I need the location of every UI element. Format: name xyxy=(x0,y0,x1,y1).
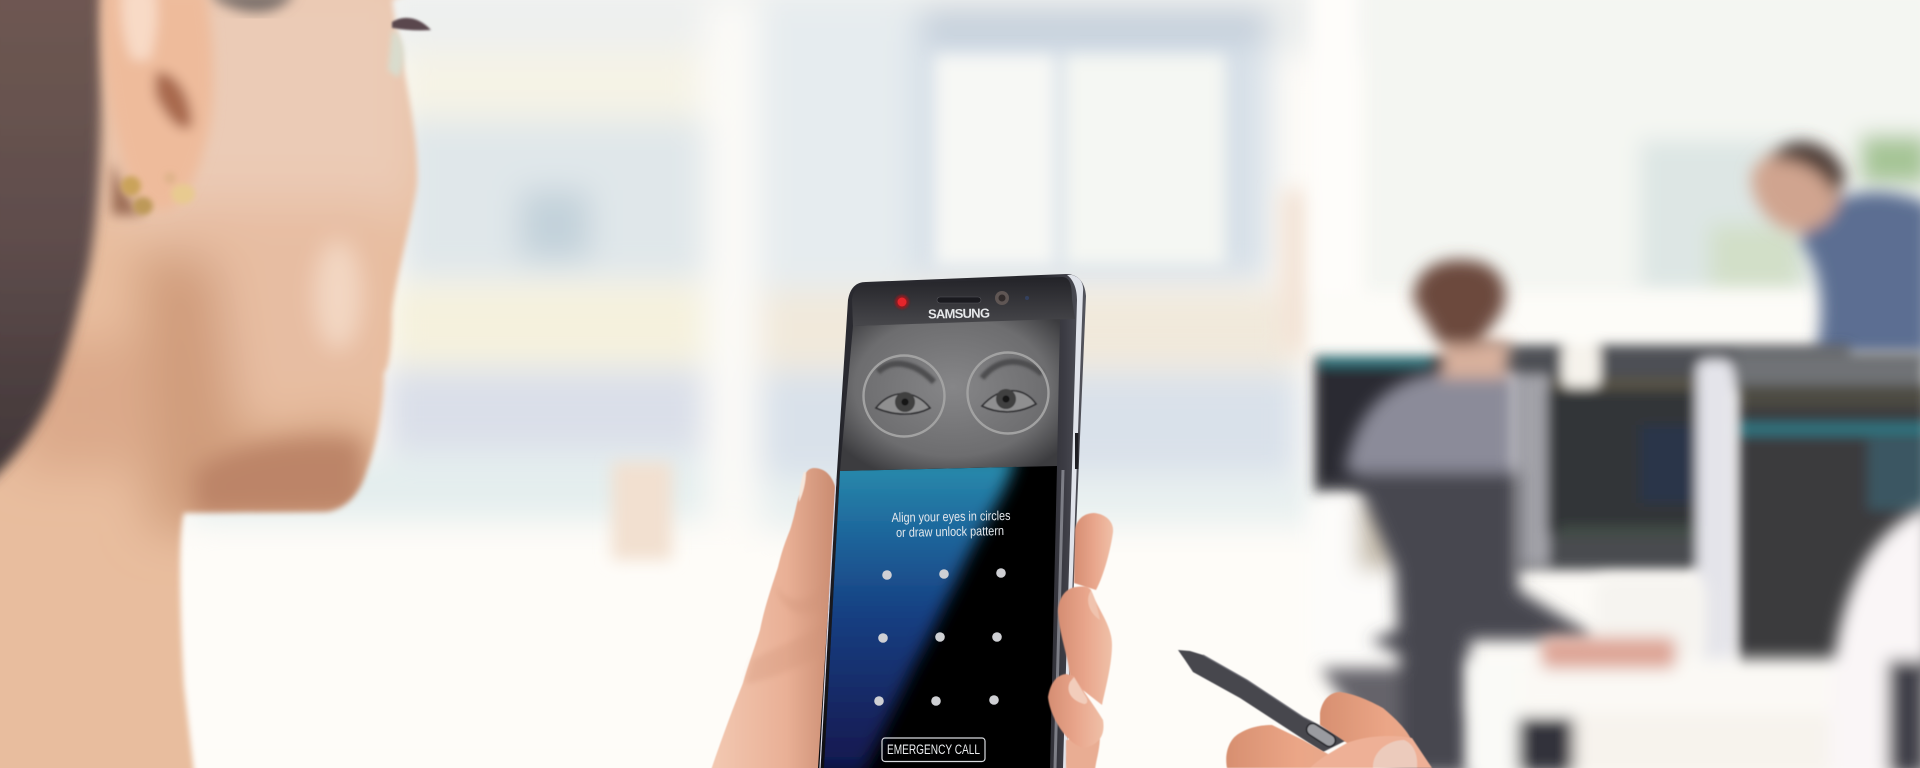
index finger xyxy=(1226,725,1345,768)
woman: hair, face, ear and earring xyxy=(0,0,440,768)
phone body xyxy=(818,274,1086,768)
emergency call button: EMERGENCY CALL xyxy=(887,742,980,757)
screen: face preview xyxy=(840,315,1065,475)
S Pen stylus xyxy=(1178,650,1347,752)
unlock instruction text xyxy=(891,508,1011,540)
thumb with nail xyxy=(1310,736,1432,768)
earring xyxy=(121,172,195,215)
hair xyxy=(0,0,102,485)
front camera xyxy=(995,291,1009,305)
unlock instruction text: Align your eyes in circles xyxy=(891,508,1011,525)
right eye xyxy=(982,362,1042,412)
white objects left of chair xyxy=(1310,495,1398,665)
emergency call button xyxy=(882,738,985,762)
brow shadow xyxy=(205,0,295,12)
right hand holding stylus xyxy=(1226,692,1432,768)
left hand behind phone xyxy=(711,468,836,768)
left eye xyxy=(876,364,934,414)
window panes and paper cup xyxy=(612,55,1225,560)
chair and seated person xyxy=(1320,260,1600,768)
upper finger xyxy=(1320,692,1432,768)
side button xyxy=(1075,433,1078,469)
proximity sensor xyxy=(1025,296,1029,300)
monitors xyxy=(1315,345,1920,685)
stylus button xyxy=(1304,721,1338,749)
speaker xyxy=(937,297,981,303)
index finger xyxy=(1074,513,1113,590)
window frame at right xyxy=(1280,0,1920,350)
eyelashes xyxy=(392,18,431,30)
chrome reflection xyxy=(1055,470,1063,768)
ring finger xyxy=(1048,674,1104,748)
skin silhouette with soft shading xyxy=(0,0,440,768)
iris circle right xyxy=(968,352,1048,434)
middle finger xyxy=(1058,586,1112,705)
screen: unlock panel xyxy=(824,466,1057,768)
iris circle left xyxy=(864,356,944,436)
desk xyxy=(1466,505,1920,768)
red iris LED xyxy=(895,295,909,309)
pattern dots xyxy=(874,568,1006,706)
SAMSUNG logo: SAMSUNG xyxy=(928,305,990,322)
lower wrist xyxy=(1066,735,1100,768)
right-side fingers holding phone xyxy=(1048,513,1113,768)
thumbnail sliver xyxy=(799,472,806,502)
ear xyxy=(103,0,213,215)
knuckle crease xyxy=(775,580,826,614)
standing man in blue xyxy=(1752,142,1920,355)
top bezel xyxy=(852,277,1075,326)
unlock instruction text: or draw unlock pattern xyxy=(896,523,1004,540)
phone xyxy=(800,274,1086,768)
